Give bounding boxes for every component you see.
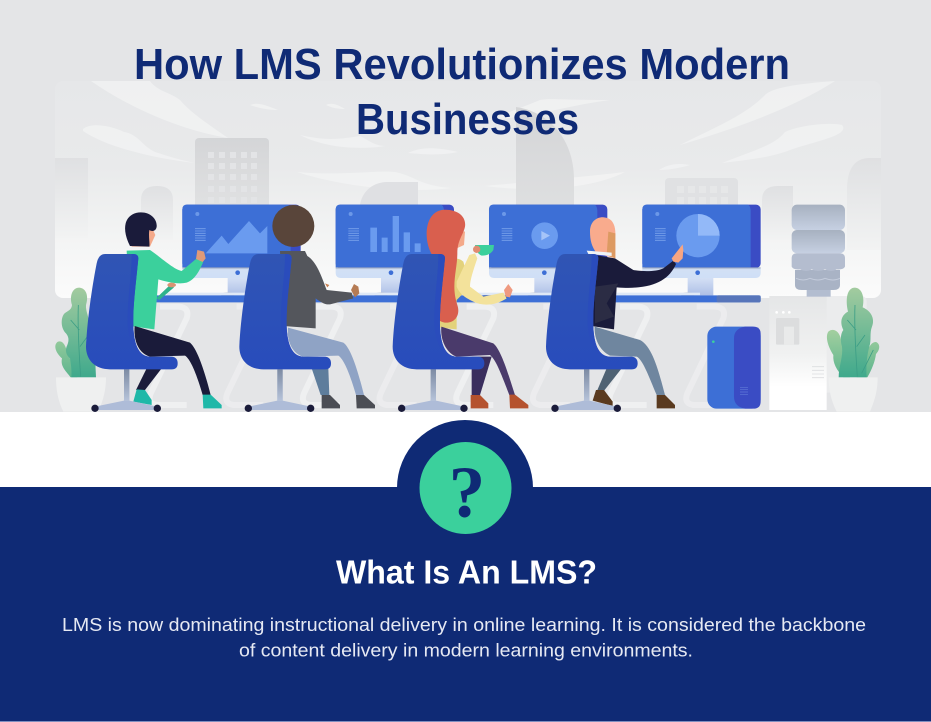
pants	[441, 327, 515, 395]
panel: office illustration backdrop	[55, 81, 881, 298]
head	[132, 223, 155, 247]
icon: question mark	[420, 442, 512, 534]
heading: What Is An LMS?	[336, 554, 597, 590]
computer tower	[707, 327, 761, 409]
desk	[155, 295, 761, 302]
far arm	[156, 285, 174, 300]
pants	[595, 327, 665, 395]
pants	[134, 326, 211, 395]
person 4: bald man pointing	[546, 217, 683, 412]
hair	[427, 210, 465, 323]
torso	[127, 250, 203, 329]
shoe	[356, 395, 375, 408]
arm raised	[457, 253, 507, 305]
title	[134, 40, 790, 144]
back leg and shoe	[136, 368, 162, 390]
panel: what is an LMS	[0, 420, 931, 722]
sweater	[592, 255, 676, 329]
shoe	[509, 395, 528, 408]
left edge building	[55, 158, 88, 238]
right plant and pot	[827, 288, 879, 412]
body text: LMS is now dominating instructional delivery in online learning. It is considered the backbone	[62, 614, 866, 635]
dome behind icon	[397, 420, 533, 488]
right edge building	[847, 158, 881, 250]
panel: desk and staff, left half coordinate space	[150, 205, 761, 405]
person 2: grey sweater	[239, 205, 375, 412]
face	[457, 230, 465, 248]
icon: question mark: ?	[449, 452, 485, 532]
person 3: red hair with cup	[393, 210, 528, 412]
sweater	[280, 251, 353, 328]
shoe	[657, 395, 675, 408]
keyboards strip	[167, 293, 700, 295]
tall centre tower	[516, 107, 574, 250]
rounded grey building centre	[360, 182, 418, 240]
monitor 3: video player	[489, 205, 607, 297]
shoe	[203, 395, 222, 408]
small building right	[762, 186, 793, 240]
monitor 1: line chart	[182, 205, 301, 297]
small rounded building left	[141, 186, 173, 240]
white band	[0, 412, 931, 488]
head	[590, 217, 615, 258]
left plant and pot	[55, 288, 106, 412]
grey building right	[665, 178, 738, 228]
hand	[196, 250, 206, 262]
pointing hand	[672, 244, 683, 263]
body text: of content delivery in modern learning environments.	[239, 640, 693, 660]
person 1: green sweater	[86, 212, 222, 412]
title: Businesses	[356, 95, 579, 144]
torso	[438, 258, 470, 329]
monitor 2: bar chart	[336, 205, 454, 297]
hand and cup	[473, 245, 494, 256]
grey office tower with windows	[195, 138, 269, 218]
clouds	[83, 81, 843, 190]
title: How LMS Revolutionizes Modern	[134, 40, 790, 89]
page background	[0, 0, 931, 412]
pants	[288, 328, 364, 395]
monitor 4: pie chart	[642, 205, 761, 297]
panel: water cooler	[769, 205, 867, 410]
hair	[272, 205, 314, 247]
body text	[62, 614, 866, 660]
floor desk legs	[150, 307, 724, 405]
